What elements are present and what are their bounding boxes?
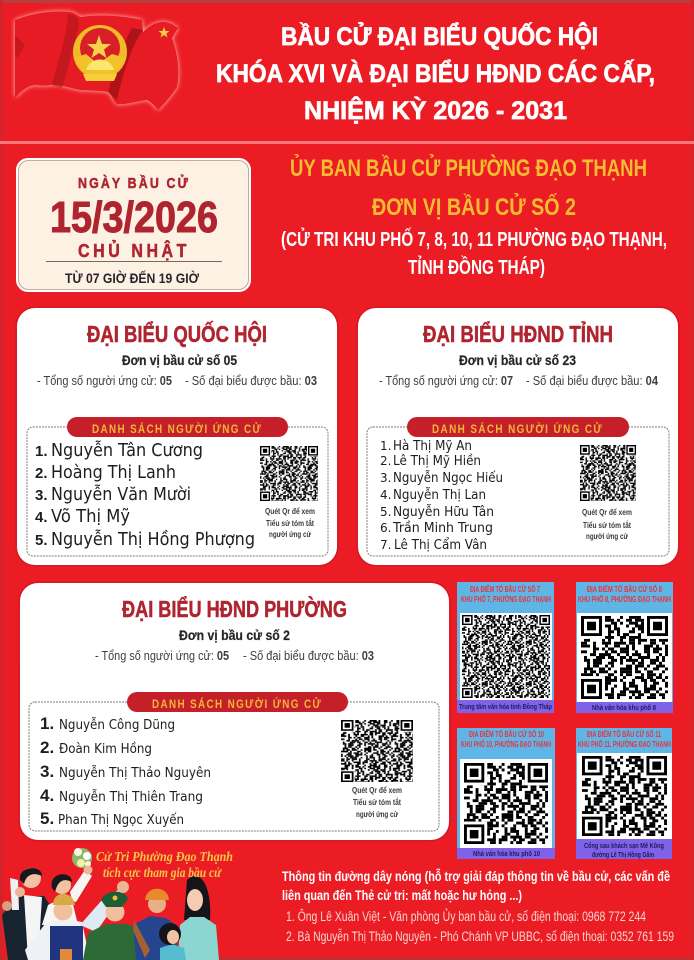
figure: worker in orange helmet [133,889,178,960]
figure: worker in apron [25,894,90,960]
list: candidates: 2. [40,738,54,757]
list: candidates: Nguyễn Tân Cương [51,440,203,461]
list: candidates: Nguyễn Hữu Tân [393,503,494,520]
icon: flag star [158,27,170,38]
figure: soldier [83,881,147,960]
list: candidates: 2. [380,454,391,468]
label: candidate list pill [127,692,348,712]
list: candidates: 3. [40,762,54,781]
heading: election committee: ĐƠN VỊ BẦU CỬ SỐ 2 [372,192,576,221]
caption: QR: Tiểu sử tóm tắt [266,517,314,528]
text: candidate counts: - Số đại biểu được bầu: 03 [243,648,374,663]
heading: election committee: TỈNH ĐỒNG THÁP) [408,255,545,279]
list: candidates [35,440,255,550]
QR code: candidate bios [580,445,636,501]
card: polling place 11: đường Lê Thị Hồng Gấm [592,850,654,859]
caption: QR [352,785,402,819]
card: polling place 8 [576,582,673,713]
caption: QR: người ứng cử [356,809,399,819]
caption: QR: Quét Qr để xem [582,507,632,517]
icon: national flag with emblem [15,11,178,110]
label: candidate list pill [407,417,629,437]
title: KHÓA XVI VÀ ĐẠI BIỂU HĐND CÁC CẤP, [216,58,655,88]
card: polling place 8: Nhà văn hóa khu phố 8 [592,703,656,712]
list: candidates [40,714,211,828]
text block: hotline [282,868,674,944]
caption: QR: Quét Qr để xem [265,506,315,516]
list: candidates: Nguyễn Công Dũng [59,716,175,733]
text: candidate counts: - Tổng số người ứng cử: 07 [379,373,513,388]
icon: flower bouquet [72,848,92,868]
list: candidates: Hà Thị Mỹ An [393,438,472,454]
panel: election date: CHỦ NHẬT [78,240,190,261]
text: candidate counts [37,373,317,388]
panel: Đại biểu Quốc hội [16,307,338,566]
card: polling place 7: ĐỊA ĐIỂM TỔ BẦU CỬ SỐ 7 [470,584,540,594]
list: candidates: Võ Thị Mỹ [51,507,130,527]
heading: Đại biểu HĐND phường: ĐẠI BIỂU HĐND PHƯỜNG [122,595,347,622]
heading: election committee [281,153,667,279]
QR code: candidate bios [260,446,318,501]
caption: QR: người ứng cử [269,529,312,539]
panel: election date: NGÀY BẦU CỬ [78,174,190,192]
text: candidate counts: - Tổng số người ứng cử: 05 [37,373,172,388]
card: polling place 10: ĐỊA ĐIỂM TỔ BẦU CỬ SỐ 10 [469,729,544,739]
caption: QR: Tiểu sử tóm tắt [353,796,401,807]
illustration: voters group [2,848,219,960]
panel: candidate list [29,702,439,831]
list: candidates: 5. [380,505,391,519]
list: candidates: Phan Thị Ngọc Xuyến [58,811,184,828]
list: candidates [380,438,503,553]
icon: national emblem [73,25,127,81]
list: candidates: Hoàng Thị Lanh [51,463,176,483]
figure: child [159,923,186,960]
list: candidates: 1. [40,714,54,733]
figure: raised arm [80,890,125,932]
panel: candidate list [367,427,669,556]
title [216,21,655,125]
panel: election date: TỪ 07 GIỜ ĐẾN 19 GIỜ [65,271,199,286]
card: polling place 11: Cổng sau khách sạn Mê Kông [584,841,664,850]
caption: QR: Quét Qr để xem [352,785,402,795]
caption: QR [582,507,632,541]
text: candidate counts [379,373,659,388]
title: BẦU CỬ ĐẠI BIỂU QUỐC HỘI [281,21,598,51]
slogan [96,850,233,881]
title: NHIỆM KỲ 2026 - 2031 [304,95,567,125]
caption: QR: Tiểu sử tóm tắt [583,519,631,530]
label: candidate list pill [67,417,288,437]
text: candidate counts [95,648,374,663]
text: candidate counts: - Số đại biểu được bầu: 04 [526,373,659,388]
QR code: place 8 [581,616,668,699]
card: polling place 10: Nhà văn hóa khu phố 10 [473,849,540,858]
QR code: candidate bios [341,720,413,782]
list: candidates: 3. [380,471,391,485]
card: polling place 7: KHU PHỐ 7, PHƯỜNG ĐẠO THẠNH [461,594,551,604]
list: candidates: 4. [40,786,54,805]
panel: election date [17,159,250,291]
card: polling place 7: Trung tâm văn hóa tỉnh Đồng Tháp [459,702,552,711]
list: candidates: Đoàn Kim Hồng [59,740,152,757]
panel: Đại biểu HĐND phường [19,582,450,841]
text: constituency: Đơn vị bầu cử số 23 [459,353,576,368]
list: candidates: 2. [35,465,48,482]
list: candidates: 6. [380,521,391,535]
list: candidates: 3. [35,487,48,504]
list: candidates: 5. [35,532,48,549]
list: candidates: Nguyễn Thị Hồng Phượng [51,529,255,550]
list: candidates: 4. [35,509,48,526]
list: candidates: Nguyễn Thị Thảo Nguyên [59,764,211,781]
caption: QR: người ứng cử [586,531,629,541]
list: candidates: Nguyễn Thị Thiên Trang [59,788,203,805]
QR code: place 10 [464,763,548,844]
card: polling place 10 [457,728,555,859]
list: candidates: 1. [380,439,391,453]
card: polling place 8: ĐỊA ĐIỂM TỔ BẦU CỬ SỐ 8 [587,584,662,594]
slogan: tích cực tham gia bầu cử [103,866,222,881]
label: candidate list pill: DANH SÁCH NGƯỜI ỨNG CỬ [92,423,262,436]
list: candidates: Nguyễn Ngọc Hiếu [393,469,503,486]
list: candidates: Lê Thị Mỹ Hiền [393,452,481,469]
figure: man with child [2,868,52,960]
text: constituency: Đơn vị bầu cử số 2 [179,628,290,643]
QR code: place 7 [462,615,550,698]
card: polling place 11: ĐỊA ĐIỂM TỔ BẦU CỬ SỐ 11 [587,729,661,739]
list: candidates: Nguyễn Thị Lan [393,486,486,503]
panel: Đại biểu HĐND tỉnh [357,307,679,566]
QR code: place 11 [582,756,667,836]
caption: QR [265,506,315,539]
card: polling place 10: KHU PHỐ 10, PHƯỜNG ĐẠO THẠNH [461,739,551,749]
list: candidates: 4. [380,488,391,502]
panel: election date: 15/3/2026 [50,193,218,242]
text: constituency: Đơn vị bầu cử số 05 [122,353,237,368]
label: candidate list pill: DANH SÁCH NGƯỜI ỨNG CỬ [152,698,322,711]
text: candidate counts: - Số đại biểu được bầu: 03 [185,373,317,388]
label: candidate list pill: DANH SÁCH NGƯỜI ỨNG CỬ [432,423,603,436]
list: candidates: Nguyễn Văn Mười [51,484,191,505]
text block: hotline: liên quan đến Thẻ cử tri: mất hoặc hư hỏng ...) [282,887,522,903]
slogan: Cử Tri Phường Đạo Thạnh [96,850,233,865]
heading: Đại biểu Quốc hội: ĐẠI BIỂU QUỐC HỘI [87,320,267,347]
card: polling place 7 [457,582,554,713]
panel: candidate list [27,427,328,556]
list: candidates: Trần Minh Trung [392,520,493,536]
list: candidates: Lê Thị Cẩm Vân [394,536,487,553]
figure: woman waving [42,866,92,925]
list: candidates: 1. [35,443,48,460]
text: candidate counts: - Tổng số người ứng cử: 05 [95,648,229,663]
card: polling place 11 [576,728,672,859]
list: candidates: 5. [40,809,54,828]
heading: Đại biểu HĐND tỉnh: ĐẠI BIỂU HĐND TỈNH [423,319,613,347]
figure: woman in ao dai [178,876,219,960]
list: candidates: 7. [380,538,391,552]
